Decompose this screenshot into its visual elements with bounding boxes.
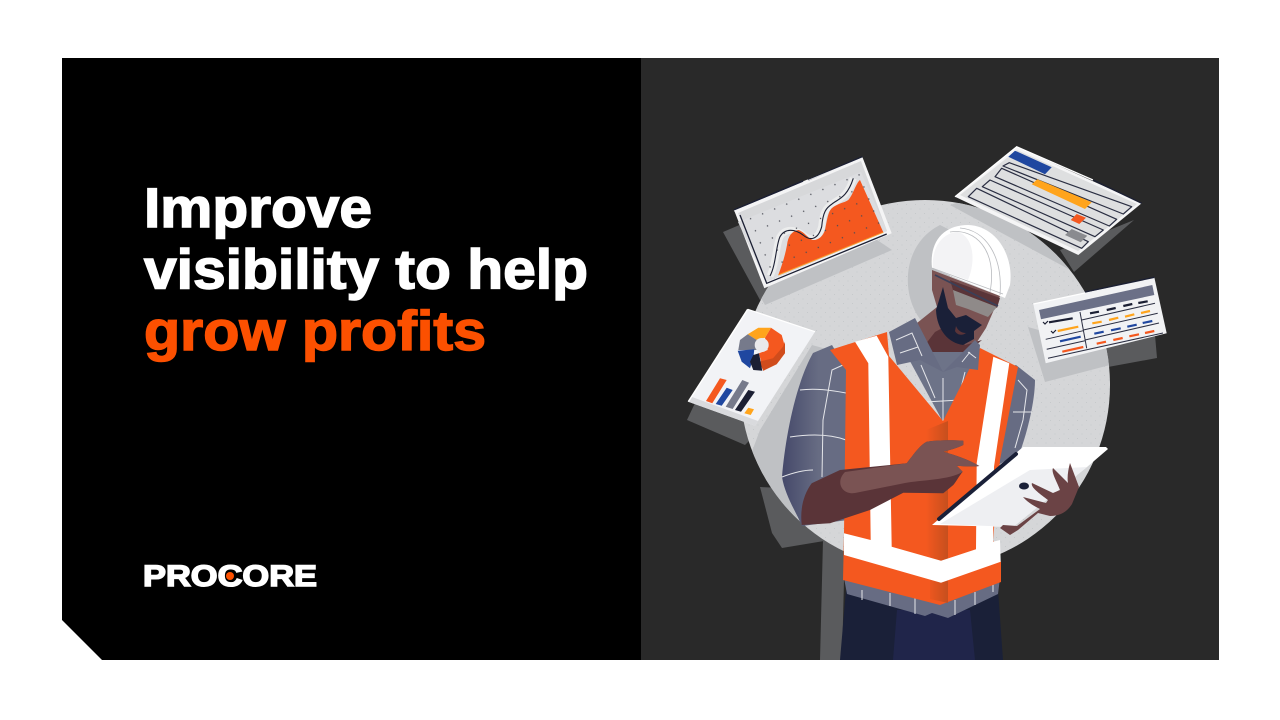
reflective stripes bbox=[844, 336, 1009, 583]
gantt bars bbox=[1008, 151, 1052, 174]
trend line bbox=[770, 178, 853, 276]
holding hand bbox=[1000, 463, 1079, 535]
hard hat bbox=[932, 225, 1011, 298]
background circle bbox=[740, 200, 1110, 570]
shirt V bbox=[910, 352, 970, 420]
left sleeve bbox=[782, 345, 848, 526]
card: area chart bbox=[734, 157, 892, 288]
card: data table bbox=[1033, 277, 1167, 363]
trousers bbox=[840, 590, 1003, 660]
tablet bbox=[932, 447, 1108, 527]
figure: worker bbox=[782, 225, 1108, 660]
logo: Procore: PROCORE bbox=[143, 560, 317, 593]
donut bbox=[738, 328, 785, 371]
beard bbox=[936, 287, 982, 345]
area bbox=[778, 180, 883, 275]
neck and face bbox=[918, 270, 1000, 352]
pointing arm bbox=[801, 440, 979, 525]
heading: title bbox=[144, 176, 588, 362]
collar bbox=[889, 318, 980, 372]
right sleeve bbox=[1000, 365, 1035, 464]
trend line band bbox=[770, 178, 853, 276]
safety glasses bbox=[935, 275, 998, 317]
shirt hem bbox=[844, 578, 1000, 618]
high-vis vest bbox=[830, 332, 1018, 605]
card: gantt schedule bbox=[955, 147, 1142, 255]
shadows on circle bbox=[752, 202, 1109, 520]
card: donut and bar report bbox=[688, 309, 815, 426]
panel: dark illustration panel bbox=[641, 58, 1219, 660]
heading: title: visibility to help bbox=[144, 238, 588, 300]
plaid lines bbox=[782, 365, 1032, 615]
heading: title: Improve bbox=[144, 176, 372, 239]
panel: black title panel bbox=[62, 58, 641, 660]
bars bbox=[706, 378, 727, 403]
shadows behind figure and cards on dark panel bbox=[687, 195, 1157, 660]
rows bbox=[968, 163, 1132, 248]
illustration: worker with floating reports bbox=[687, 147, 1167, 660]
heading: title: grow profits bbox=[144, 299, 486, 362]
